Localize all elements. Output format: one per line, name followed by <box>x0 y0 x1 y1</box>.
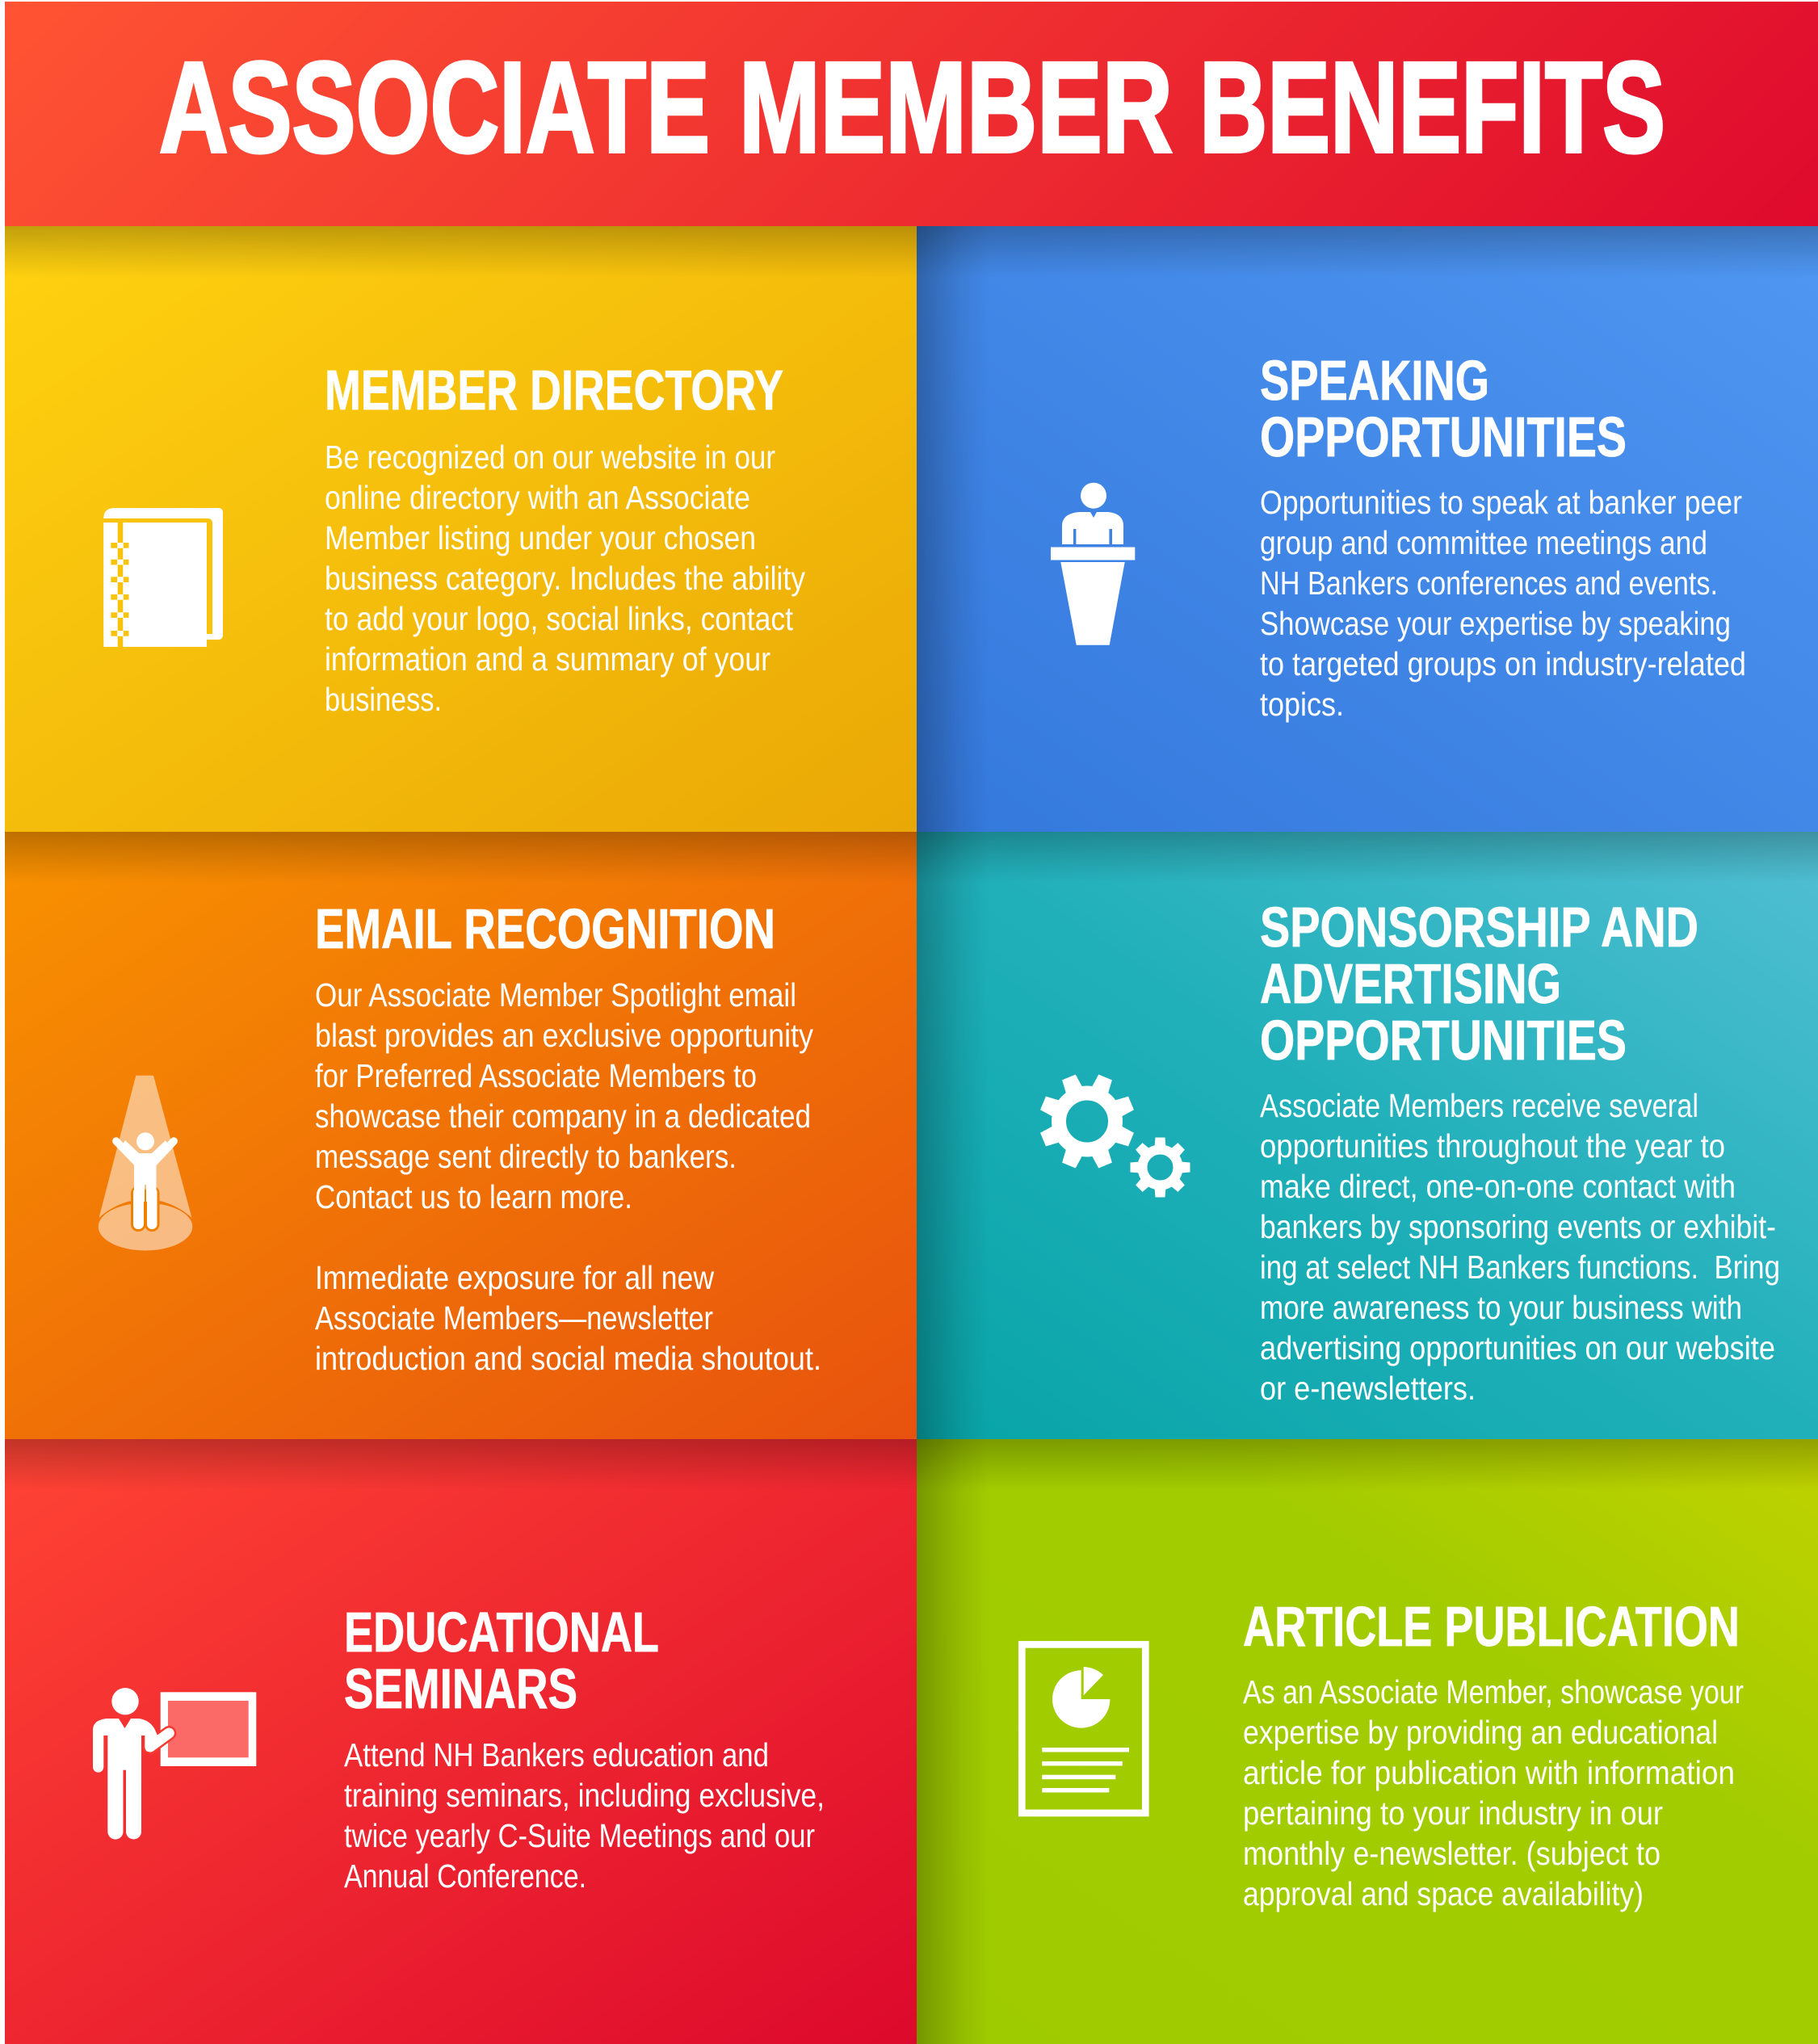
heading: sponsorship and advertising opportunities <box>1260 896 1698 1072</box>
text block: sponsorship and advertising: or e-newsletters. <box>1260 1370 1476 1407</box>
text block: member directory: Member listing under your chosen <box>325 519 756 556</box>
text block: article publication: monthly e-newsletter. (subject to <box>1243 1835 1661 1872</box>
heading: sponsorship and advertising opportunities: SPONSORSHIP AND <box>1260 896 1698 959</box>
text block: email recognition: Contact us to learn more. <box>315 1178 632 1215</box>
panel: article publication <box>917 1439 1818 2044</box>
panel: member directory <box>5 226 917 832</box>
text block: email recognition: blast provides an exclusive opportunity <box>315 1017 813 1054</box>
text block: member directory: to add your logo, social links, contact <box>325 600 794 637</box>
text block: member directory: Be recognized on our website in our <box>325 439 775 476</box>
icon: document with pie chart <box>1022 1644 1145 1813</box>
text block: member directory: information and a summary of your <box>325 640 770 678</box>
heading: sponsorship and advertising opportunities: OPPORTUNITIES <box>1260 1009 1627 1072</box>
icon: notebook <box>103 508 223 647</box>
text block: article publication: expertise by providing an educational <box>1243 1714 1718 1751</box>
heading: speaking opportunities: OPPORTUNITIES <box>1260 405 1627 468</box>
icon: gears <box>1039 1074 1190 1197</box>
text block: sponsorship and advertising: more awareness to your business with <box>1260 1289 1742 1326</box>
heading: educational seminars: SEMINARS <box>344 1657 577 1720</box>
text block: article publication: approval and space availability) <box>1243 1875 1644 1912</box>
title: ASSOCIATE <box>159 35 710 179</box>
text block: member directory: business. <box>325 681 442 718</box>
title: MEMBER <box>739 35 1173 179</box>
heading: email recognition: EMAIL RECOGNITION <box>315 897 775 960</box>
heading: speaking opportunities: SPEAKING <box>1260 349 1489 412</box>
text block: email recognition: showcase their company in a dedicated <box>315 1098 811 1135</box>
panel: educational seminars <box>5 1439 917 2044</box>
text block: speaking opportunities: Showcase your expertise by speaking <box>1260 605 1731 642</box>
text block: article publication: pertaining to your industry in our <box>1243 1794 1663 1832</box>
text block: email recognition: Associate Members—newsletter <box>315 1299 713 1337</box>
text block: email recognition: for Preferred Associate Members to <box>315 1057 757 1094</box>
text block: email recognition <box>315 976 821 1377</box>
panel: title banner <box>5 2 1818 226</box>
text block: email recognition: message sent directly to bankers. <box>315 1138 737 1175</box>
text block: member directory <box>325 439 805 718</box>
text block: email recognition: introduction and social media shoutout. <box>315 1340 821 1377</box>
icon: person in spotlight <box>99 1076 192 1250</box>
text block: article publication <box>1243 1673 1744 1912</box>
heading: speaking opportunities <box>1260 349 1627 468</box>
text block: educational seminars: training seminars, including exclusive, <box>344 1777 825 1814</box>
text block: article publication: article for publication with information <box>1243 1754 1735 1791</box>
text block: email recognition: Our Associate Member Spotlight email <box>315 976 796 1014</box>
text block: educational seminars <box>344 1736 825 1895</box>
text block: speaking opportunities: to targeted groups on industry-related <box>1260 645 1746 682</box>
panel: speaking opportunities <box>917 226 1818 832</box>
text block: member directory: business category. Includes the ability <box>325 560 805 597</box>
icon: presenter at board <box>93 1688 256 1840</box>
icon: speaker at podium <box>1051 483 1135 645</box>
text block: member directory: online directory with an Associate <box>325 479 750 516</box>
panel: email recognition <box>5 832 917 1439</box>
heading: educational seminars <box>344 1601 659 1720</box>
heading: member directory: MEMBER DIRECTORY <box>325 359 783 422</box>
text block: speaking opportunities <box>1260 484 1746 723</box>
title <box>159 35 1665 179</box>
text block: email recognition: Immediate exposure for all new <box>315 1259 714 1296</box>
text block: sponsorship and advertising <box>1260 1087 1780 1407</box>
heading: sponsorship and advertising opportunities: ADVERTISING <box>1260 952 1561 1015</box>
text block: sponsorship and advertising: make direct, one-on-one contact with <box>1260 1168 1736 1205</box>
text block: sponsorship and advertising: opportunities throughout the year to <box>1260 1127 1725 1165</box>
text block: speaking opportunities: group and committee meetings and <box>1260 524 1707 561</box>
text block: speaking opportunities: Opportunities to speak at banker peer <box>1260 484 1742 521</box>
heading: educational seminars: EDUCATIONAL <box>344 1601 659 1664</box>
panel: sponsorship and advertising opportunities <box>917 832 1818 1439</box>
text block: sponsorship and advertising: Associate Members receive several <box>1260 1087 1698 1124</box>
text block: speaking opportunities: topics. <box>1260 686 1344 723</box>
text block: educational seminars: twice yearly C-Suite Meetings and our <box>344 1817 815 1854</box>
text block: speaking opportunities: NH Bankers conferences and events. <box>1260 565 1718 602</box>
text block: educational seminars: Annual Conference. <box>344 1857 586 1895</box>
text block: educational seminars: Attend NH Bankers education and <box>344 1736 769 1773</box>
